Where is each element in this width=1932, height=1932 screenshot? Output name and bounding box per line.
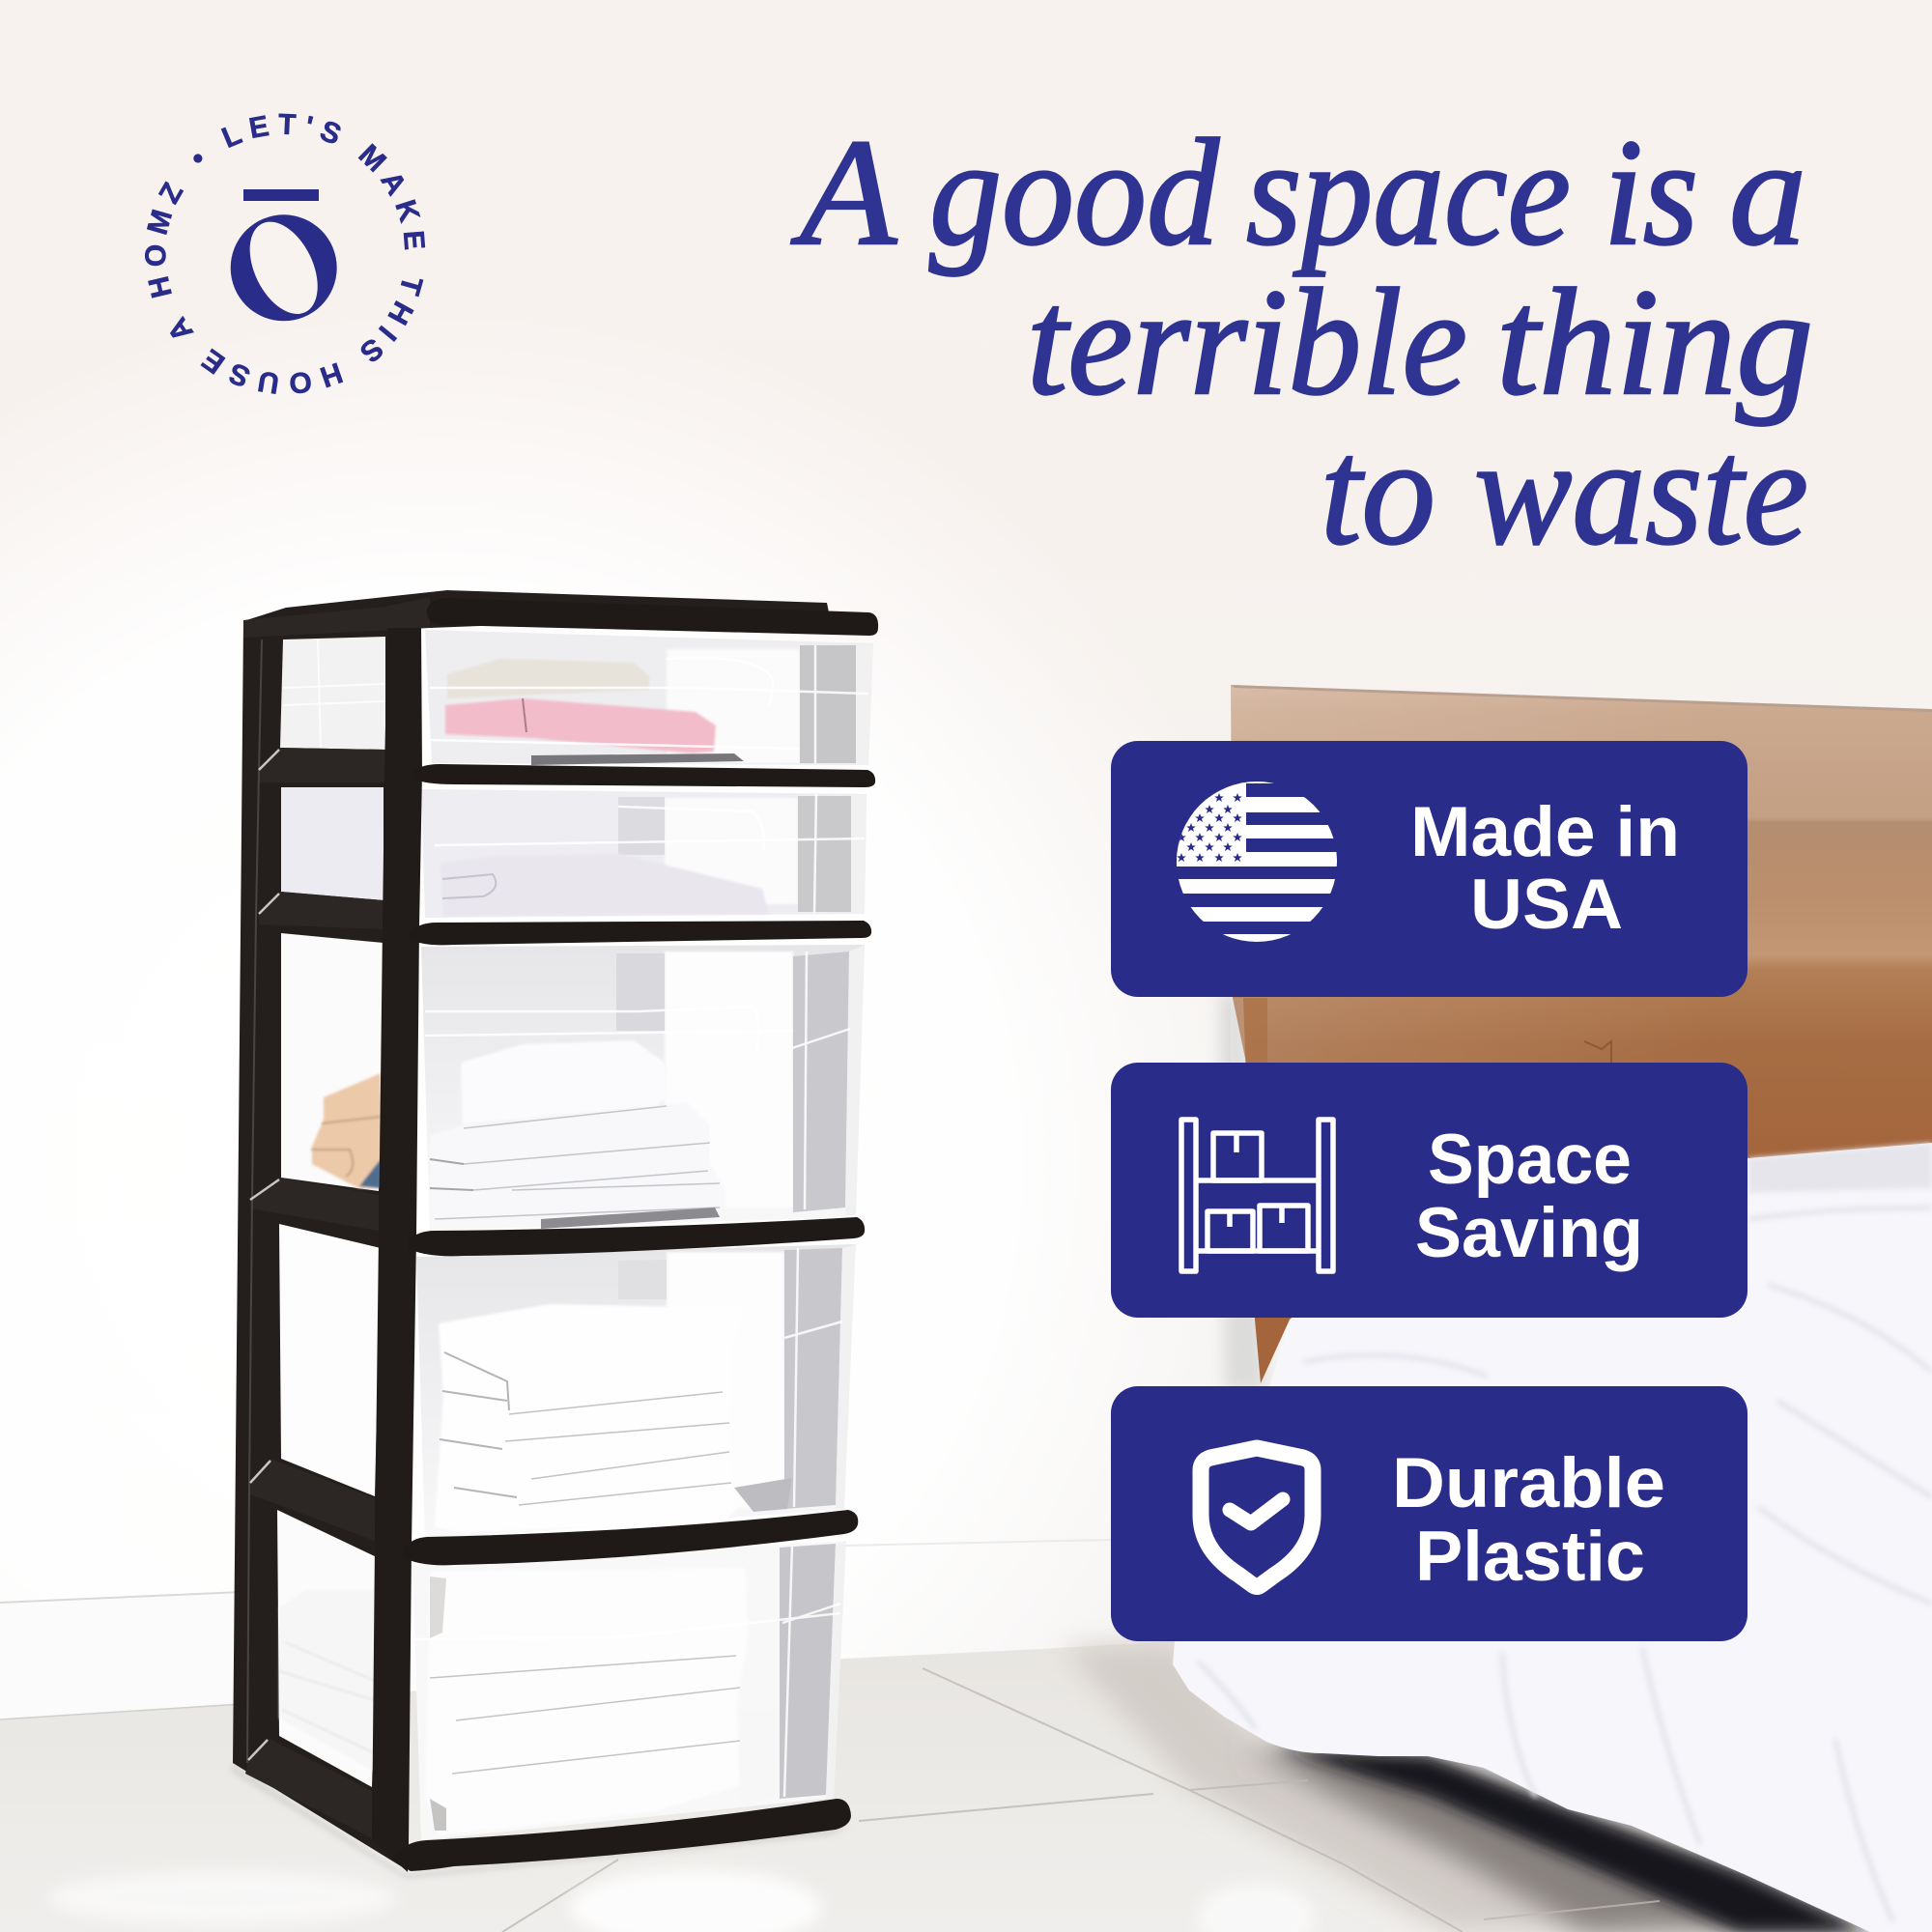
label: Made in USA: USA <box>1470 866 1623 944</box>
headline word: good: good <box>929 108 1220 277</box>
headline word: space: space <box>1246 108 1571 277</box>
headline word: waste: waste <box>1474 408 1808 577</box>
frame: side panel and posts <box>233 590 829 1869</box>
logo mark: o with macron <box>231 189 337 325</box>
cabinet shadow on floor <box>232 1763 850 1879</box>
label: Durable Plastic <box>1392 1444 1665 1596</box>
baseboard and tiled floor <box>0 1540 1932 1932</box>
side opening level 1 <box>280 637 385 750</box>
drawer handle bar 2 <box>412 764 875 787</box>
label: Space Saving: Space <box>1428 1121 1632 1199</box>
drawer handle bar 4 <box>408 1217 865 1256</box>
icon: storage shelf with boxes <box>1181 1120 1333 1271</box>
drawer handle bar 3 <box>410 921 871 945</box>
side opening level 2 <box>281 787 384 900</box>
storage drawer cabinet <box>232 590 878 1879</box>
headline word: terrible: terrible <box>1027 258 1467 427</box>
drawer 2 (white towel) <box>421 789 867 918</box>
drawer 5 (towel stack) <box>412 1541 846 1840</box>
drawer 4 (towel stack) <box>416 1244 856 1539</box>
card: Durable Plastic <box>1111 1386 1747 1641</box>
label: Made in USA: Made in <box>1410 793 1680 871</box>
label: Space Saving: Saving <box>1415 1194 1643 1272</box>
side opening level 3 <box>281 933 384 1191</box>
headline word: a: a <box>1729 108 1806 277</box>
folded tan towels <box>311 1073 381 1188</box>
frame top rail highlight <box>243 597 430 638</box>
headboard <box>1231 685 1932 1383</box>
rear post highlights <box>247 639 262 1763</box>
headline word: is: is <box>1604 108 1698 277</box>
icon: american flag globe <box>1177 781 1337 944</box>
headline word: thing: thing <box>1496 258 1813 427</box>
circular slogan: • LET'S MAKE THIS HOUSE A HOMZ <box>145 114 425 394</box>
card: Space Saving <box>1111 1063 1747 1318</box>
logo badge <box>145 114 425 394</box>
label: Durable Plastic: Plastic <box>1415 1518 1645 1596</box>
drawer handle bar 6 (base) <box>391 1799 851 1871</box>
side opening level 5 <box>277 1510 379 1787</box>
white side towels <box>279 1590 377 1772</box>
drawer 3 (towel stack) <box>421 945 865 1231</box>
icon: shield with check mark <box>1201 1448 1313 1586</box>
bed with white duvet <box>1173 1143 1932 1932</box>
front post <box>372 628 422 1872</box>
wall shadow beside headboard <box>1219 995 1265 1391</box>
label: Space Saving <box>1415 1121 1643 1272</box>
side opening level 4 <box>279 1224 381 1496</box>
drawer handle bar 1 (lid) <box>427 598 878 636</box>
card: Made in USA <box>1111 741 1747 997</box>
drawer 1 (top, pink towel) <box>425 630 873 765</box>
headline <box>791 108 1813 577</box>
headline word: A: A <box>791 108 898 277</box>
headline word: to: to <box>1321 408 1435 577</box>
label: Made in USA <box>1410 793 1680 944</box>
side rails <box>245 748 385 1838</box>
label: Durable Plastic: Durable <box>1392 1444 1665 1522</box>
drawer handle bar 5 <box>403 1510 858 1565</box>
